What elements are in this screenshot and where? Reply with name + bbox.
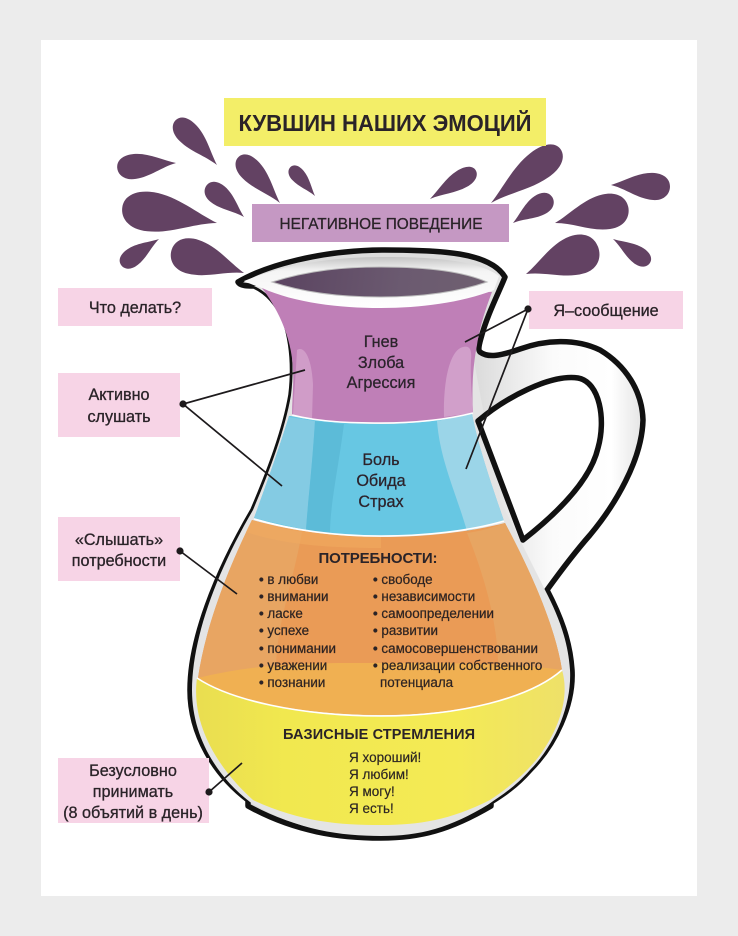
callout: hear the needs: «Слышать» [75,531,163,549]
text: anger block: Агрессия [347,374,415,392]
needs list left: • в любви [259,572,318,587]
glass body inner [192,285,570,836]
needs list left: • успехе [259,623,309,638]
callout: I-message [529,291,683,329]
layer: purple [262,288,492,423]
needs list right: • реализации собственного [373,658,542,673]
callout: active listening [58,373,180,437]
heading: negative behaviour: НЕГАТИВНОЕ ПОВЕДЕНИЕ [280,216,482,233]
text: affirmations: Я хороший! [349,750,421,765]
orange right tint [467,523,562,704]
title: КУВШИН НАШИХ ЭМОЦИЙ [238,109,532,136]
text: affirmations: Я есть! [349,801,394,816]
drop [200,177,251,225]
handle opening [478,378,601,540]
needs list left [259,572,336,690]
text: pain block [356,451,406,511]
needs list left: • ласке [259,606,303,621]
title [224,98,546,146]
left splash drops [116,112,321,290]
drop [551,190,632,240]
liquid opening [272,267,487,297]
heading: needs: ПОТРЕБНОСТИ: [318,550,438,567]
callout: I-message: Я–сообщение [553,302,659,320]
needs list left: • уважении [259,658,327,673]
liquid surface, back [198,663,562,715]
needs list right: • самосовершенствовании [373,641,538,656]
drop [507,188,558,232]
callout: hear the needs: потребности [72,552,166,570]
callout: unconditional acceptance [58,758,209,823]
needs list right: • независимости [373,589,475,604]
layer: orange [198,520,562,715]
pointer: hear the needs [176,547,237,594]
needs list left: • внимании [259,589,328,604]
drop [167,112,225,173]
pointer: acceptance [205,763,242,796]
purple highlight left [293,349,313,419]
layer dividers [197,413,562,716]
orange left tint [198,520,302,708]
callout: hear the needs [58,517,180,581]
callout: unconditional acceptance: Безусловно [89,762,177,780]
orange top light band [246,520,381,548]
jug rim [244,257,499,308]
text: affirmations [349,750,421,816]
text: affirmations: Я любим! [349,767,409,782]
drop [608,232,655,270]
needs list right: • самоопределении [373,606,494,621]
layer: blue [254,414,504,536]
right splash drops [425,137,670,293]
callout: unconditional acceptance: (8 объятий в день) [63,804,203,822]
heading: negative behaviour [252,204,509,242]
needs list right: • свободе [373,572,433,587]
callout: what to do: Что делать? [89,299,181,317]
heading: basic strivings: БАЗИСНЫЕ СТРЕМЛЕНИЯ [283,727,475,743]
text: pain block: Страх [358,493,404,511]
needs list right: потенциала [380,675,454,690]
text: anger block [347,333,415,392]
text: pain block: Боль [362,451,400,469]
drop [119,188,220,243]
needs list left: • познании [259,675,325,690]
pointer: I-message [465,305,532,469]
text: anger block: Гнев [364,333,398,351]
blue darker strip [306,421,344,534]
blue right tint [437,414,504,531]
drop [519,228,605,293]
drop [425,162,481,207]
needs list right: • развитии [373,623,438,638]
pointer: active listening [179,370,305,486]
text: pain block: Обида [356,472,406,490]
drop [230,149,289,211]
callout: what to do [58,288,212,326]
jug [190,250,643,838]
drop [482,137,570,215]
text: affirmations: Я могу! [349,784,395,799]
blue left tint [254,417,315,530]
jug silhouette with handle [190,250,643,838]
callout: unconditional acceptance: принимать [93,783,173,801]
callout: active listening: слушать [87,408,151,426]
needs list left: • понимании [259,641,336,656]
drop [285,162,321,201]
drop [116,151,177,180]
drop [611,171,670,201]
drop [116,231,164,273]
text: anger block: Злоба [358,354,404,372]
needs list right [373,572,542,690]
purple highlight right [444,347,473,417]
layer: yellow [196,670,565,825]
drop [166,233,249,290]
callout: active listening: Активно [88,386,150,404]
